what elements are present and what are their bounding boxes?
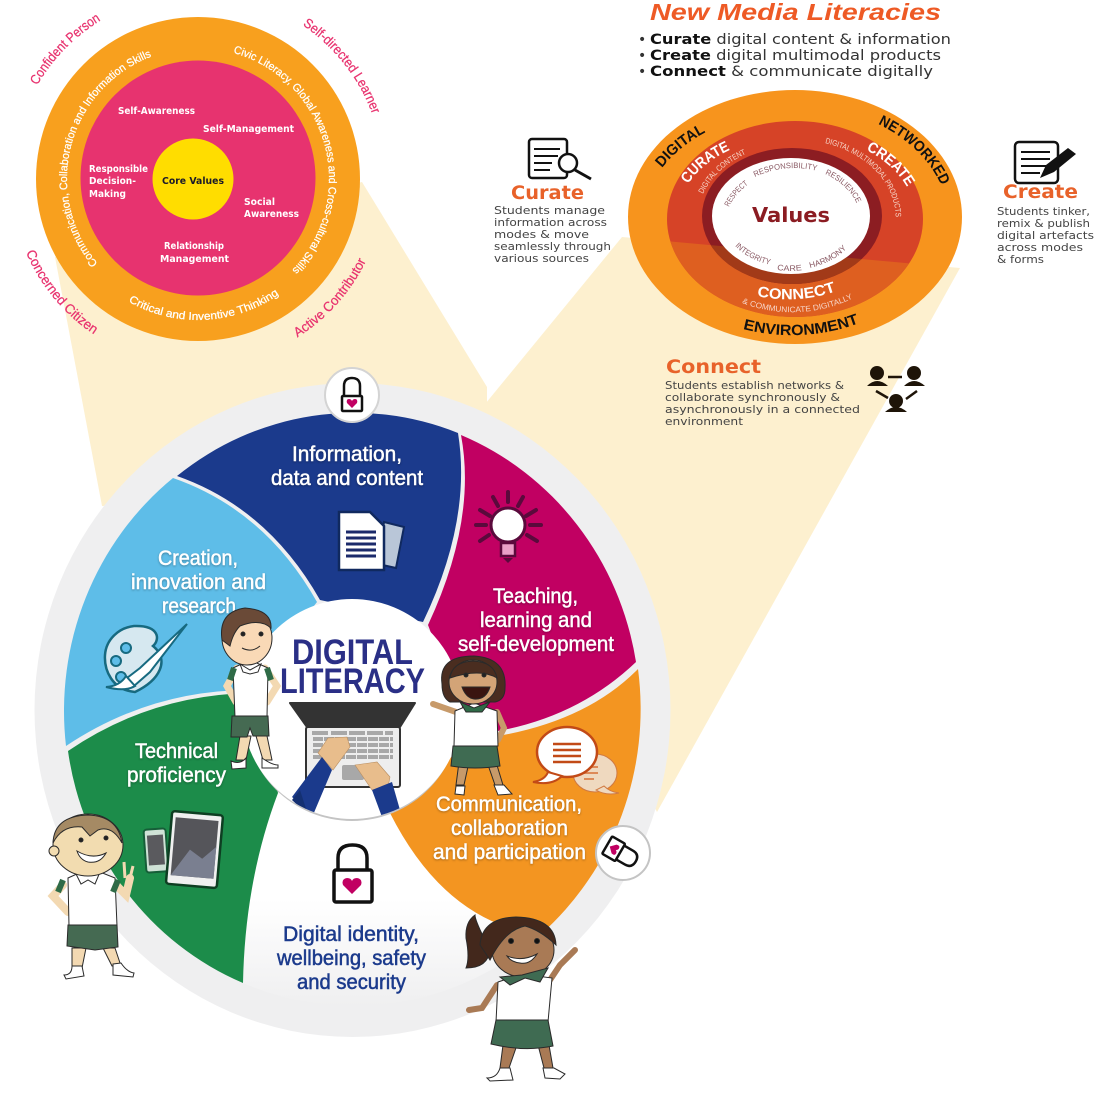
icon: light bulb [476,492,541,563]
text: digital identity: wellbeing, safety [276,947,426,970]
value labels: RESILIENCE [826,169,862,203]
callout: Create: digital artefacts [997,229,1094,242]
environment labels: DIGITAL [654,126,706,168]
text: creation [131,547,266,618]
text: communication: Communication, [436,793,582,816]
ring: pink social emotional [80,60,316,296]
segment: teaching [428,435,636,735]
panel: 21st century competencies circle [27,15,380,341]
skill labels: & COMMUNICATE DIGITALLY [742,293,851,312]
environment labels: ENVIRONMENT [744,314,856,336]
segment: communication [390,669,641,935]
callout: Connect: Connect [666,356,761,378]
icon: document with pencil [1015,142,1076,183]
callout: Create: & forms [997,253,1044,266]
callout: Curate: seamlessly through [494,240,611,253]
text: teaching: self-development [458,633,614,656]
skill labels: DIGITAL CONTENT [698,149,744,194]
ring: orange environment [628,90,962,344]
outcome labels [27,15,380,338]
callout: Curate: Students manage [494,204,605,217]
beam: left highlight [55,182,487,506]
text: information: data and content [271,467,423,490]
pink ring labels: Self-Awareness [118,106,195,117]
text: creation: innovation and [131,571,266,594]
text: communication: collaboration [451,817,568,840]
text: communication [433,793,586,864]
callout: Curate [494,182,611,265]
text: information [271,443,423,490]
callout: Connect [665,356,860,428]
ring: dark red [702,148,882,284]
character: girl top [433,656,512,795]
text: creation: research [162,595,236,618]
text: digital identity: Digital identity, [283,923,419,946]
orange ring labels: Critical and Inventive Thinking [130,290,279,320]
segment: creation [64,478,317,746]
core values circle [152,138,234,220]
core values circle: Core Values [162,176,224,187]
text: teaching: learning and [480,609,592,632]
lower tint overlay [670,242,909,317]
segment: technical [68,693,278,983]
bullet list: • [638,48,646,64]
icon: document with magnifier [529,139,591,179]
text: communication: and participation [433,841,586,864]
callout: Create: Create [1003,181,1078,203]
value labels: CARE [778,264,802,271]
outcome labels: Concerned Citizen [27,250,97,334]
pink ring labels: Relationship [164,241,224,252]
icon: connected people [867,366,925,412]
centre circle shadow [244,605,460,821]
bullet list: Create digital multimodal products [650,48,941,64]
outcome labels: Active Contributor [295,258,366,338]
callout: Create [997,181,1094,266]
callout: Connect: collaborate synchronously & [665,391,840,404]
text: creation: Creation, [158,547,238,570]
value labels: INTEGRITY [736,242,771,264]
character: boy left [49,814,134,979]
callout: Connect: Students establish networks & [665,379,844,392]
centre: values: Values [752,203,830,227]
icon: palette and brush [105,624,187,692]
pink ring labels: Making [89,189,126,200]
outcome labels: Confident Person [30,15,100,84]
text: teaching [458,585,614,656]
pink ring labels: Management [160,254,229,265]
title: digital literacy [280,633,425,701]
pink ring labels: Decision- [89,176,136,187]
panel: digital literacy wheel [34,368,670,1037]
pink ring labels: Responsible [89,164,148,175]
skill labels: DIGITAL MULTIMODAL PRODUCTS [826,138,902,217]
pink ring labels [89,106,299,265]
character: girl bottom [466,915,575,1081]
callout: Connect: environment [665,415,744,428]
callout: Curate: modes & move [494,228,589,241]
value labels: HARMONY [809,244,845,268]
callout: Create: across modes [997,241,1083,254]
ring: red skills [667,121,923,317]
segment: digital identity [243,793,540,1006]
centre: values [712,158,870,274]
callout: Connect: asynchronously in a connected [665,403,860,416]
orange ring labels [58,46,338,320]
callout: Create: remix & publish [997,217,1090,230]
pink ring labels: Social [244,197,275,208]
bullet list: Curate digital content & information [650,32,951,48]
wheel rim [34,383,670,1037]
text: teaching: Teaching, [493,585,578,608]
orange ring labels: Communication, Collaboration and Information Skills [58,51,151,267]
icon: documents [339,512,404,570]
segment: information [177,413,461,622]
bullet list: • [638,64,646,80]
beam: right highlight [472,237,960,812]
pink ring labels: Awareness [244,209,299,220]
callout: Create: Students tinker, [997,205,1090,218]
ring: outer orange [36,17,360,341]
orange ring labels: Civic Literacy, Global Awareness and Cross-cultural Skills [234,46,338,274]
value labels: RESPONSIBILITY [753,162,818,177]
text: technical: proficiency [127,764,226,787]
bullet list [638,32,951,80]
title: digital literacy: DIGITAL [292,633,413,672]
callout: Curate: information across [494,216,607,229]
medallion: lock top [325,368,379,422]
text: digital identity [276,923,426,994]
text: technical [127,740,226,787]
environment labels: NETWORKED [878,115,949,184]
callout: Curate: various sources [494,252,589,265]
text: information: Information, [292,443,402,466]
bullet list: • [638,32,646,48]
pink ring labels: Self-Management [203,124,294,135]
icon: large lock with heart [334,845,372,902]
skill labels: CREATE [868,142,916,186]
icon: speech bubbles [533,727,619,794]
title: digital literacy: LITERACY [280,662,425,701]
skill labels: CONNECT [758,282,834,300]
skill labels [682,138,916,312]
callout: Curate: Curate [511,182,584,204]
character: boy top [221,608,278,769]
icon: tablet and phone [143,811,223,888]
dark ring tint [711,245,861,284]
environment labels [654,115,949,336]
value labels [724,162,862,271]
text: technical: Technical [135,740,218,763]
text: digital identity: and security [297,971,406,994]
outcome labels: Self-directed Learner [304,18,380,112]
centre circle [242,599,462,819]
icon: laptop [290,703,415,817]
bullet list: Connect & communicate digitally [650,64,933,80]
medallion: lock right [596,826,650,880]
skill labels: CURATE [682,140,730,182]
panel: new media literacies ring diagram [628,90,962,344]
value labels: RESPECT [724,180,747,206]
